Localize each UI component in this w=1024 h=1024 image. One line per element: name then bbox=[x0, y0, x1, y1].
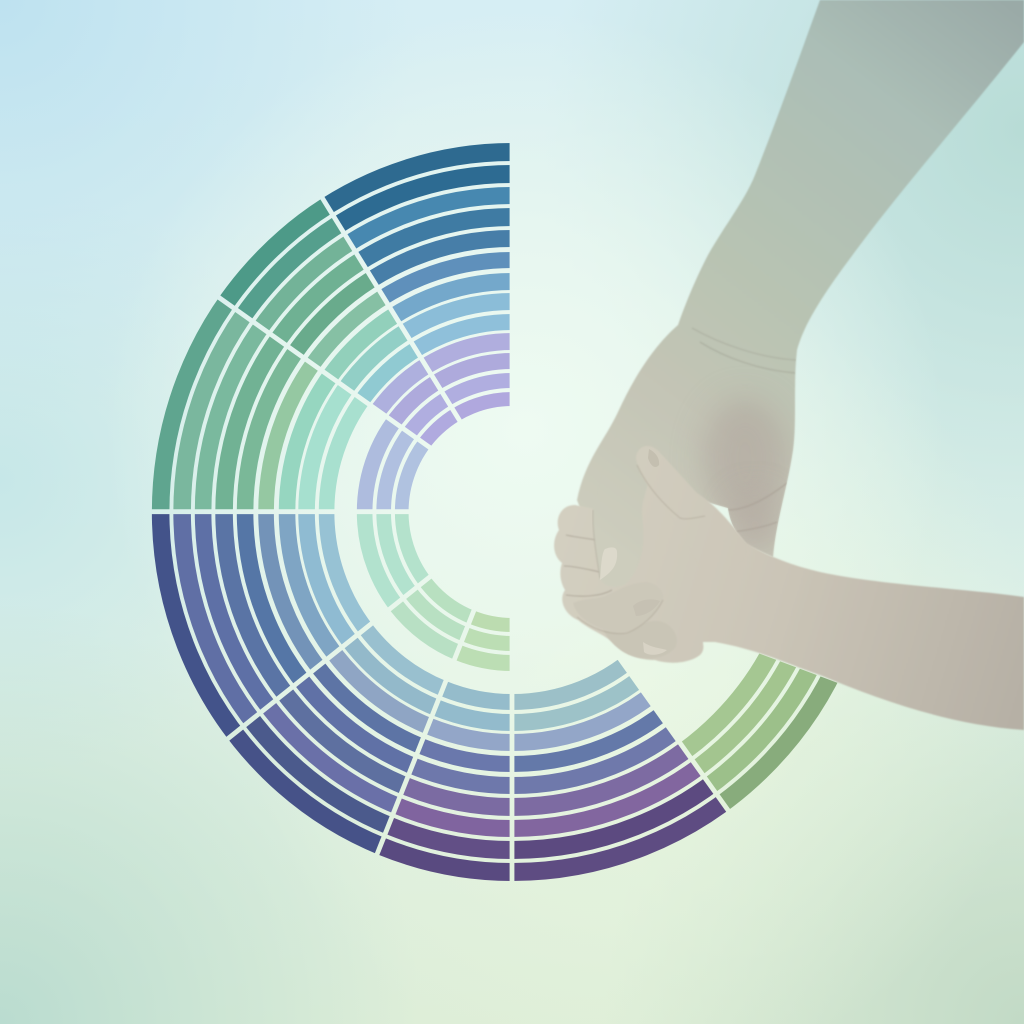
sector: bottom purple rings right of centre bbox=[514, 660, 726, 881]
child arm and hand bbox=[554, 450, 1024, 730]
sector: lower-left blue rings bbox=[152, 514, 428, 737]
sector: upper-left green to teal rings bbox=[220, 200, 458, 446]
adult thumb bbox=[593, 430, 660, 587]
sector: lower-right green rings bbox=[682, 654, 838, 809]
infographic artwork bbox=[152, 0, 1024, 881]
adult arm and hand bbox=[577, 0, 1024, 570]
child thumb bbox=[636, 446, 747, 573]
sector: bottom purple rings left of centre bbox=[379, 611, 510, 881]
sector: top blue rings bbox=[324, 143, 510, 420]
clasped hands illustration bbox=[554, 0, 1024, 730]
sector: left green rings bbox=[152, 300, 428, 510]
child finger outline bbox=[577, 600, 663, 634]
child lower fingernail bbox=[643, 642, 667, 655]
child finger separations bbox=[564, 535, 612, 596]
adult thumbnail bbox=[600, 547, 617, 580]
sector: lower blue-indigo rings bbox=[229, 578, 472, 854]
adult thumb edge bbox=[593, 510, 600, 578]
adult palm shading bbox=[692, 328, 796, 557]
child lower finger two bbox=[603, 621, 677, 659]
child fingernail bbox=[633, 599, 660, 616]
child thumb crease bbox=[637, 465, 705, 519]
child lower finger one bbox=[573, 582, 663, 633]
child thumbnail bbox=[648, 449, 659, 467]
radial segmented chart bbox=[154, 152, 870, 872]
